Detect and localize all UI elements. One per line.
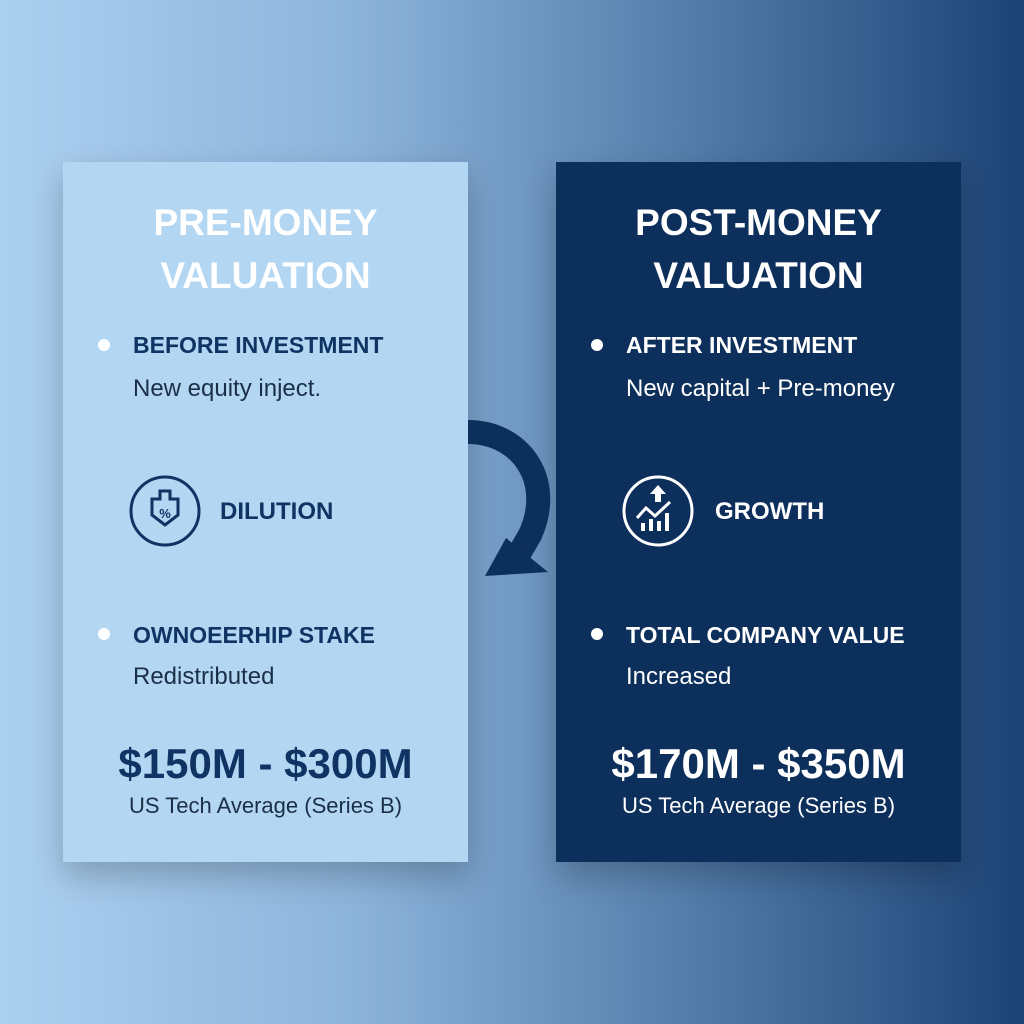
bullet: ownership	[98, 628, 110, 640]
title: post-money valuation: VALUATION	[653, 255, 864, 296]
note: US Tech Average (Series B)	[129, 793, 402, 818]
label: growth: GROWTH	[715, 498, 824, 525]
value: pre-money range: $150M - $300M	[118, 740, 413, 787]
value: post-money range: $170M - $350M	[611, 740, 906, 787]
bullet: total value	[591, 628, 603, 640]
icon: dilution: %	[159, 506, 171, 521]
icon: dilution	[130, 476, 200, 546]
panel: pre-money	[63, 162, 468, 862]
arrow: curved from pre to post	[468, 420, 550, 576]
label: dilution: DILUTION	[220, 498, 333, 525]
heading: total company value: TOTAL COMPANY VALUE	[626, 622, 905, 648]
note: US Tech Average (Series B)	[622, 793, 895, 818]
bullet: before investment	[98, 339, 110, 351]
text: increased: Increased	[626, 663, 731, 690]
heading: before investment: BEFORE INVESTMENT	[133, 332, 383, 358]
text: redistributed: Redistributed	[133, 663, 274, 690]
title: pre-money valuation	[153, 202, 378, 296]
panel: post-money	[556, 162, 961, 862]
title: pre-money valuation: VALUATION	[160, 255, 371, 296]
text: new equity inject: New equity inject.	[133, 375, 321, 402]
title: post-money valuation: POST-MONEY	[635, 202, 882, 243]
text: new capital: New capital + Pre-money	[626, 375, 895, 402]
bullet: after investment	[591, 339, 603, 351]
icon: growth	[622, 476, 694, 546]
heading: ownership stake: OWNOEERHIP STAKE	[133, 622, 375, 648]
title: pre-money valuation: PRE-MONEY	[153, 202, 378, 243]
title: post-money valuation	[635, 202, 882, 296]
heading: after investment: AFTER INVESTMENT	[626, 332, 857, 358]
